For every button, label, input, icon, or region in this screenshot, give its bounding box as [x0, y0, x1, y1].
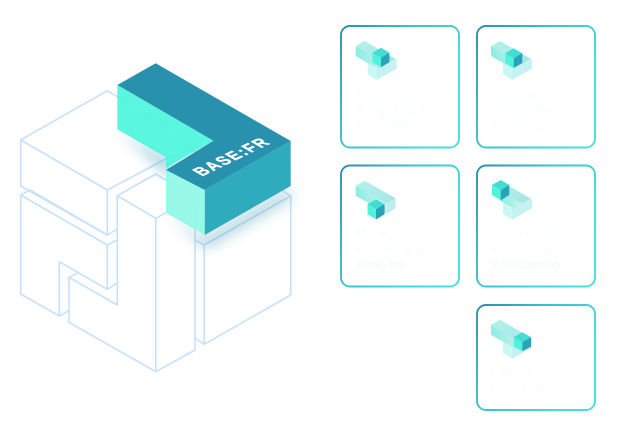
card: management reporting and analysis	[341, 166, 459, 286]
icon: blocks with cube at the join	[491, 41, 532, 80]
card text: Forecasting	[492, 257, 559, 272]
card text: Planning,	[356, 86, 410, 101]
card text: Strategic	[492, 86, 543, 101]
card: strategic long-term planning	[477, 26, 595, 148]
card: cash flow analysis and forecasting	[477, 166, 595, 286]
card: planning, budgeting and forecasting	[341, 26, 459, 148]
highlighted logo block	[117, 63, 291, 235]
icon: blocks with cube in the middle	[356, 41, 397, 80]
block top face	[117, 63, 291, 190]
card text: Long-term	[492, 102, 551, 117]
card text: Forecasting	[356, 118, 423, 133]
card text: Planning	[492, 118, 542, 133]
logo text: BASE:FR	[189, 135, 276, 179]
block shadows	[120, 129, 291, 248]
card text: Planning	[492, 380, 542, 395]
card text: Capital	[492, 364, 532, 379]
card text: Cash Flow	[492, 225, 554, 240]
icon: bar with cube below	[356, 181, 396, 220]
block front mint face	[166, 170, 205, 235]
card text: Budgeting &	[356, 102, 427, 117]
card text: Analysis	[356, 257, 404, 272]
icon: blocks with cube at right end	[491, 320, 532, 359]
card text: Analysis &	[492, 241, 553, 256]
card text: Reporting &	[356, 241, 424, 256]
card: capital planning	[477, 305, 595, 410]
icon: blocks with cube at top left	[491, 180, 532, 220]
block left mint face	[117, 85, 213, 168]
card text: Management	[356, 225, 432, 240]
block right face	[205, 141, 291, 235]
wireframe logo outline	[21, 91, 291, 372]
